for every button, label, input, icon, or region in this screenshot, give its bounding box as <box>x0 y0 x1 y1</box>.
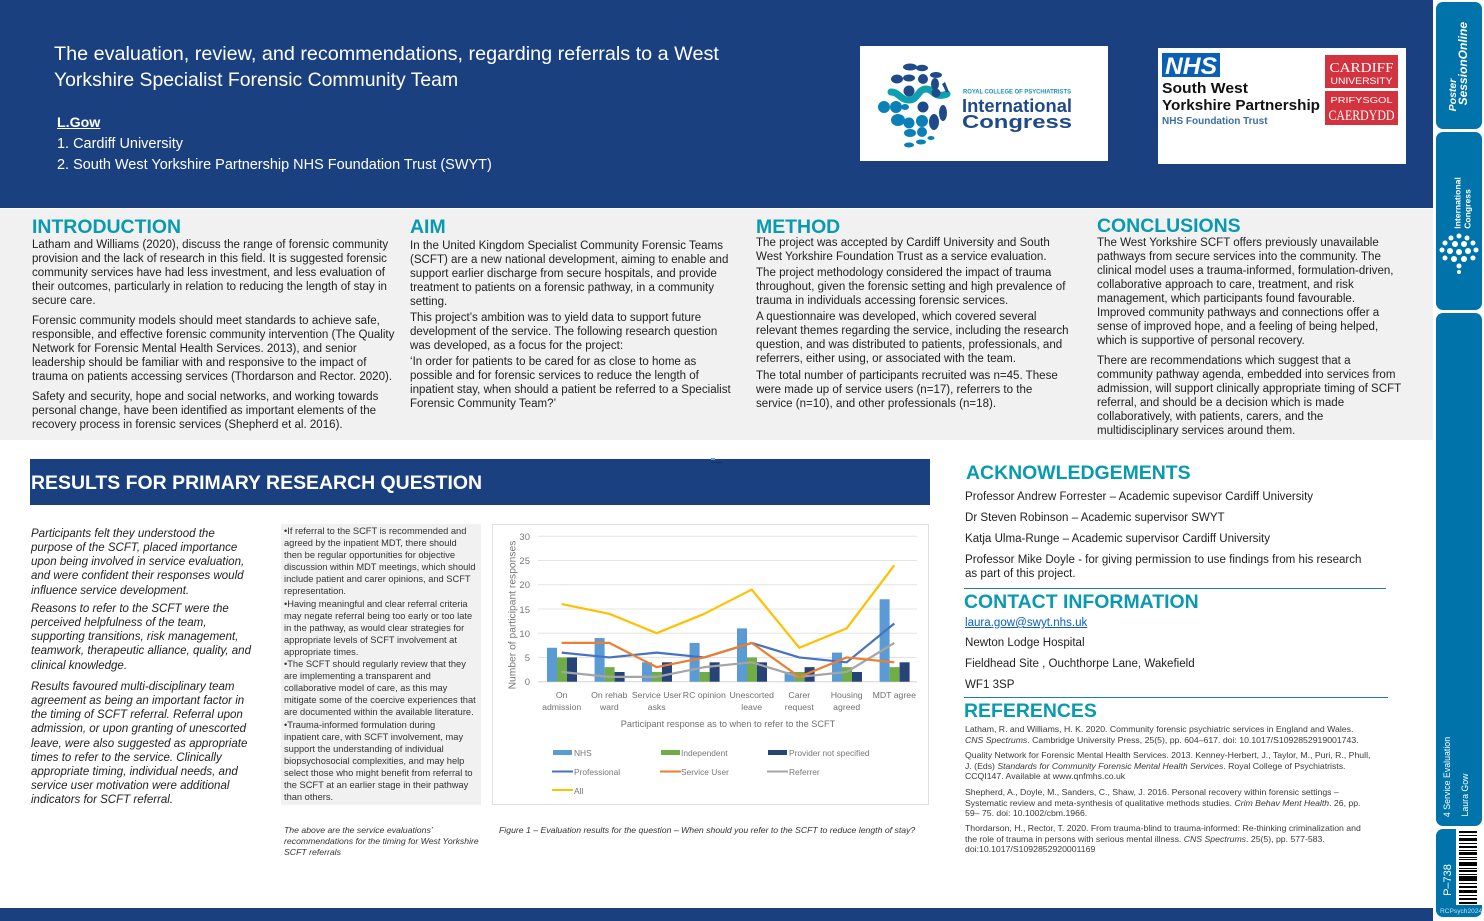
text: introduction paragraph 3 <box>32 391 378 431</box>
authors and affiliations: 2. South West Yorkshire Partnership NHS Foundation Trust (SWYT) <box>57 157 492 173</box>
text: method paragraph 4: were made up of service users (n=17), referrers to the <box>756 384 1032 396</box>
text: reference 3: Shepherd, A., Doyle, M., Sanders, C., Shaw, J. 2016. Personal recovery within forensic settings – <box>965 787 1339 797</box>
text: aim paragraph 2: development of the service. The following research question <box>410 326 717 338</box>
text: introduction paragraph 3: recovery process in forensic services (Shepherd et al. 2016). <box>32 419 343 431</box>
text: reference 2: J. (Eds) Standards for Community Forensic Mental Health Services. Royal College of Psychiatrists. <box>965 761 1345 771</box>
lines <box>562 565 894 677</box>
sidebar tab: PosterSessionOnline <box>1436 2 1482 129</box>
panel: recommendations: then be regular opportunities for objective <box>284 550 455 560</box>
y axis labels: 20 <box>519 580 530 591</box>
text: aim paragraph 2: This project’s ambition was to yield data to support future <box>410 312 701 324</box>
legend: NHS <box>574 748 592 758</box>
text: method paragraph 1 <box>756 237 1050 263</box>
heading: aim: AIM <box>410 216 446 238</box>
text: method paragraph 3 <box>756 311 1069 365</box>
text: recommendations caption: recommendations for the timing for West Yorkshire <box>284 836 479 846</box>
text: introduction paragraph 1: provision and the lack of research in this field. It is suggested forensic <box>32 253 387 265</box>
text: contact details: WF1 3SP <box>965 679 1014 691</box>
text: conclusions paragraph 2: admission, will support clinically appropriate timing of SCFT <box>1097 383 1401 395</box>
text: recommendations caption: The above are the service evaluations’ <box>284 825 433 835</box>
y axis title: Number of participant responses <box>508 541 518 689</box>
text: RCPsych2024: RCPsych2024 <box>1440 908 1482 915</box>
category labels: Carer <box>788 690 810 700</box>
sidebar tab: International Congress <box>1436 132 1482 310</box>
icon: barcode <box>1456 829 1482 905</box>
text: results summary: Participants felt they understood the <box>31 528 215 540</box>
text: introduction paragraph 2: leadership should be familiar with and responsive to the impact of <box>32 357 366 369</box>
legend: Service User <box>681 767 729 777</box>
text: conclusions paragraph 2: collaboratively, with patients, carers, and the <box>1097 411 1323 423</box>
header band <box>0 0 1433 208</box>
text: contact details: Fieldhead Site , Ouchthorpe Lane, Wakefield <box>965 658 1195 670</box>
panel: recommendations: •The SCFT should regularly review that they <box>284 659 466 669</box>
text: reference 1: Latham, R. and Williams, H. K. 2020. Community forensic psychiatric services in England and Wales. <box>965 724 1353 734</box>
text: reference 1 <box>965 724 1359 745</box>
category labels: request <box>785 702 814 712</box>
text: results summary: clinical knowledge. <box>31 660 127 672</box>
text: acknowledgement names: Dr Steven Robinson – Academic supervisor SWYT <box>965 512 1225 524</box>
text: trust name: NHS Foundation Trust <box>1162 116 1268 127</box>
text: aim research question: Forensic Community Team?’ <box>410 398 556 410</box>
panel: references <box>964 700 1370 854</box>
text: aim paragraph 1: (SCFT) are a new national development, aiming to enable and <box>410 254 728 266</box>
icon: Cardiff University crest: PRIFYSGOL <box>1330 95 1393 105</box>
panel: recommendations: •If referral to the SCFT is recommended and <box>284 526 466 536</box>
text: aim research question: ‘In order for patients to be cared for as close to home as <box>410 356 696 368</box>
sidebar tab: poster number and barcode <box>1436 829 1482 917</box>
sidebar tab: International Congress: Congress <box>1462 189 1472 229</box>
title <box>54 43 719 90</box>
panel: recommendations: support the understanding of individual <box>284 744 444 754</box>
panel: aim <box>410 216 731 410</box>
text: introduction paragraph 2: Network for Forensic Mental Health Services. 2013), and senior <box>32 343 357 355</box>
text: method paragraph 3: relevant themes regarding the service, including the research <box>756 325 1069 337</box>
text: results summary: leave, were also suggested as appropriate <box>31 738 247 750</box>
text: results summary: teamwork, therapeutic alliance, quality, and <box>31 645 251 657</box>
panel: conclusions <box>1097 215 1401 437</box>
text: introduction paragraph 2 <box>32 315 394 383</box>
panel: recommendations: may negate referral being too early or too late <box>284 611 472 621</box>
text: results summary: the timing of SCFT referral. Referral upon <box>31 709 243 721</box>
category labels: asks <box>648 702 666 712</box>
heading: introduction: INTRODUCTION <box>32 216 181 238</box>
text: method paragraph 2: The project methodology considered the impact of trauma <box>756 267 1051 279</box>
text: acknowledgement names: Katja Ulma-Runge – Academic supervisor Cardiff University <box>965 533 1270 545</box>
panel: recommendations: discussion within MDT meetings, which should <box>284 562 476 572</box>
y axis labels: 0 <box>525 677 530 688</box>
panel: contact information <box>964 591 1199 691</box>
icon: NHS lozenge: NHS <box>1165 53 1217 80</box>
panel: recommendations: representation. <box>284 586 346 596</box>
text: introduction paragraph 3: Safety and security, hope and social networks, and working towards <box>32 391 378 403</box>
text: conclusions paragraph 2: referral, and should be a decision which is made <box>1097 397 1344 409</box>
text: Royal College of Psychiatrists: ROYAL COLLEGE OF PSYCHIATRISTS <box>963 88 1071 96</box>
panel: recommendations: are implementing a transparent and <box>284 671 431 681</box>
text: results summary: agreement as being an important factor in <box>31 695 244 707</box>
text: trust name: South West <box>1162 81 1248 97</box>
logo: NHS South West Yorkshire Partnership and Cardiff University <box>1158 48 1406 164</box>
text: contact details <box>965 617 1195 691</box>
panel: recommendations <box>281 524 481 805</box>
panel: recommendations: appropriate times. <box>284 647 358 657</box>
text: results summary: indicators for SCFT referral. <box>31 794 173 806</box>
category labels: On rehab <box>591 690 628 700</box>
text: conclusions paragraph 2: multidisciplinary services around them. <box>1097 425 1295 437</box>
text: conclusions paragraph 2: community pathway agenda, embedded into services from <box>1097 369 1395 381</box>
category labels: ward <box>599 702 619 712</box>
panel: recommendations: in the pathway, as would clear strategies for <box>284 623 464 633</box>
icon: Cardiff University crest: CARDIFF <box>1330 61 1394 76</box>
y axis labels: 30 <box>519 532 530 543</box>
title: Yorkshire Specialist Forensic Community Team <box>54 68 458 90</box>
text: reference 2 <box>965 750 1370 781</box>
y axis labels: 25 <box>519 556 530 567</box>
text: Congress: Congress <box>962 112 1072 132</box>
text: contact details: laura.gow@swyt.nhs.uk <box>965 617 1087 629</box>
chart: responses on when to refer to the SCFT <box>492 524 929 805</box>
y axis labels: 15 <box>519 605 530 616</box>
legend: Professional <box>574 767 620 777</box>
legend: Independent <box>681 748 728 758</box>
panel: recommendations: biopsychosocial complexities, and may help <box>284 756 464 766</box>
text: results summary: upon being involved in service evaluation, <box>31 556 244 568</box>
text: aim research question <box>410 356 731 410</box>
text: results summary: purpose of the SCFT, placed importance <box>31 542 237 554</box>
text: aim paragraph 1: support earlier discharge from secure hospitals, and provide <box>410 268 717 280</box>
logo: Royal College of Psychiatrists International Congress <box>860 46 1108 161</box>
icon: Cardiff University crest <box>1325 55 1398 125</box>
text: reference 4: the role of trauma in persons with serious mental illness. CNS Spectrums. 25(5), pp. 577-583. <box>965 834 1325 844</box>
text: recommendations caption: SCFT referrals <box>284 847 341 857</box>
panel: introduction <box>32 216 394 431</box>
text: aim paragraph 2 <box>410 312 717 352</box>
text: method paragraph 2: trauma in individuals accessing forensic services. <box>756 295 1008 307</box>
text: reference 3: 59– 75. doi: 10.1002/cbm.1966. <box>965 808 1087 818</box>
text: conclusions paragraph 1: management, which participants found favourable. <box>1097 293 1355 305</box>
authors and affiliations: L.Gow <box>57 115 100 131</box>
authors and affiliations <box>57 115 492 173</box>
text: results summary: service user motivation were additional <box>31 780 229 792</box>
panel: recommendations: select those who might benefit from referral to <box>284 768 473 778</box>
heading banner: results for primary research question <box>30 459 930 505</box>
text: results summary: supporting transitions, risk management, <box>31 631 238 643</box>
text: figure caption: Figure 1 – Evaluation results for the question – When should you refer to the SCFT to reduce length of stay? <box>499 825 915 835</box>
heading: acknowledgements: ACKNOWLEDGEMENTS <box>966 462 1191 484</box>
category labels: agreed <box>833 702 860 712</box>
text: conclusions paragraph 1: pathways from secure services into the community. The <box>1097 251 1381 263</box>
text: acknowledgement names <box>965 491 1362 580</box>
text: acknowledgement names: as part of this project. <box>965 568 1076 580</box>
category labels: RC opinion <box>683 690 726 700</box>
text: conclusions paragraph 1: clinical model uses a trauma-informed, formulation-driven, <box>1097 265 1394 277</box>
title: The evaluation, review, and recommendations, regarding referrals to a West <box>54 43 719 65</box>
text: acknowledgement names: Professor Andrew Forrester – Academic supevisor Cardiff University <box>965 491 1313 503</box>
sidebar tab: PosterSessionOnline: Poster <box>1447 79 1459 111</box>
category labels: admission <box>542 702 581 712</box>
bars <box>547 599 910 682</box>
category labels: leave <box>741 702 762 712</box>
text: introduction paragraph 1: Latham and Williams (2020), discuss the range of forensic community <box>32 239 388 251</box>
text: results summary: appropriate timing, individual needs, and <box>31 766 238 778</box>
text: poster number: P–738 <box>1442 864 1454 896</box>
panel: recommendations: agreed by the inpatient MDT, there should <box>284 538 457 548</box>
sidebar tab: International Congress: International <box>1452 177 1462 229</box>
text: method paragraph 2: throughout, given the forensic setting and high prevalence of <box>756 281 1065 293</box>
text: conclusions paragraph 1: Improved community pathways and connections offer a <box>1097 307 1379 319</box>
panel: method <box>756 216 1069 410</box>
text: contact details: Newton Lodge Hospital <box>965 637 1085 649</box>
text: conclusions paragraph 2 <box>1097 355 1401 437</box>
icon: sidebar globe <box>1440 234 1478 274</box>
text: method paragraph 4: service (n=10), and other professionals (n=18). <box>756 398 996 410</box>
panel: acknowledgements <box>965 462 1362 580</box>
y axis labels: 5 <box>525 653 530 664</box>
panel: recommendations: appropriate levels of SCFT involvement at <box>284 635 457 645</box>
text: aim paragraph 2: was developed, as a focus for the project: <box>410 340 623 352</box>
category labels: On <box>556 690 568 700</box>
sidebar tab: PosterSessionOnline: SessionOnline <box>1456 22 1470 105</box>
text: introduction paragraph 3: personal change, have been identified as important elements of the <box>32 405 376 417</box>
panel: recommendations: collaborative model of care, as this may <box>284 683 447 693</box>
text: acknowledgement names: Professor Mike Doyle - for giving permission to use findings from his research <box>965 554 1362 566</box>
text: recommendations caption <box>284 825 479 857</box>
text: reference 4 <box>965 823 1361 854</box>
text: aim research question: possible and for forensic services to reduce the length of <box>410 370 699 382</box>
text: trust name: Yorkshire Partnership <box>1162 98 1320 114</box>
text: reference 4: doi:10.1017/S1092852920001169 <box>965 844 1095 854</box>
x axis title: Participant response as to when to refer to the SCFT <box>621 719 836 729</box>
heading: conclusions: CONCLUSIONS <box>1097 215 1241 237</box>
legend: Referrer <box>789 767 820 777</box>
text: reference 1: CNS Spectrums. Cambridge University Press, 25(5), pp. 604–617. doi: 10.1017/S1092852919001743. <box>965 735 1359 745</box>
text: method paragraph 1: The project was accepted by Cardiff University and South <box>756 237 1050 249</box>
panel: recommendations: •Trauma-informed formulation during <box>284 720 435 730</box>
heading banner: results for primary research question: RESULTS FOR PRIMARY RESEARCH QUESTION <box>31 472 482 494</box>
text: aim research question: inpatient stay, when should a patient be referred to a Specialist <box>410 384 731 396</box>
text: aim paragraph 1 <box>410 240 728 308</box>
sidebar tab: session and author: 4 Service Evaluation <box>1442 737 1452 817</box>
panel: recommendations: the SCFT at an earlier stage in their pathway <box>284 780 468 790</box>
text: conclusions paragraph 1: which is supportive of personal recovery. <box>1097 335 1305 347</box>
text: method paragraph 3: referrers, either using, or associated with the team. <box>756 353 1016 365</box>
heading: references: REFERENCES <box>964 700 1097 722</box>
panel: recommendations: •Having meaningful and clear referral criteria <box>284 599 468 609</box>
category labels: Housing <box>831 690 863 700</box>
legend <box>552 748 870 796</box>
text: results summary: Reasons to refer to the SCFT were the <box>31 603 229 615</box>
text: method paragraph 1: West Yorkshire Foundation Trust as a service evaluation. <box>756 251 1047 263</box>
text: reference 3: Systematic review and meta-synthesis of qualitative methods studies. Crim Behav Ment Health. 26, pp. <box>965 798 1360 808</box>
text: conclusions paragraph 1 <box>1097 237 1394 347</box>
text: method paragraph 2 <box>756 267 1066 307</box>
authors and affiliations: 1. Cardiff University <box>57 136 183 152</box>
text: International: International <box>962 96 1072 116</box>
text: reference 3 <box>965 787 1360 818</box>
text: reference 2: CCQI147. Available at www.qnfmhs.co.uk <box>965 771 1125 781</box>
text: conclusions paragraph 1: sense of improved hope, and a feeling of being helped, <box>1097 321 1378 333</box>
category labels: MDT agree <box>873 690 916 700</box>
y axis labels <box>519 532 530 688</box>
heading: method: METHOD <box>756 216 840 238</box>
icon: Cardiff University crest: UNIVERSITY <box>1330 76 1392 86</box>
legend: Provider not specified <box>789 748 870 758</box>
text: method paragraph 3: A questionnaire was developed, which covered several <box>756 311 1037 323</box>
panel: recommendations: are documented within the available literature. <box>284 707 474 717</box>
y axis labels: 10 <box>519 629 530 640</box>
text: results summary: perceived helpfulness of the team, <box>31 617 206 629</box>
text: results summary: admission, or upon granting of unescorted <box>31 723 246 735</box>
text: reference 2: Quality Network for Forensic Mental Health Services. 2013. Kenney-Herbert, J., Taylor, M., Puri, R., Phull, <box>965 750 1370 760</box>
text: aim paragraph 1: setting. <box>410 296 447 308</box>
text: introduction paragraph 2: responsible, and effective forensic community intervention (The Quality <box>32 329 394 341</box>
text: results summary <box>30 528 252 806</box>
heading: contact information: CONTACT INFORMATION <box>964 591 1199 613</box>
category labels: Unescorted <box>729 690 774 700</box>
text: introduction paragraph 2: trauma on patients accessing services (Thordarson and Rector. 2020). <box>32 371 392 383</box>
text: aim paragraph 1: treatment to patients on a forensic pathway, in a community <box>410 282 714 294</box>
text: results summary: influence service development. <box>31 585 189 597</box>
text: introduction paragraph 1: secure care. <box>32 295 96 307</box>
text: introduction paragraph 1: community services have had less investment, and less evaluation of <box>32 267 385 279</box>
panel: recommendations: than others. <box>284 792 333 802</box>
footer band <box>0 908 1433 921</box>
panel: recommendations: mitigate some of the coercive experiences that <box>284 695 476 705</box>
sidebar tab: session and author: Laura Gow <box>1460 773 1470 817</box>
panel: recommendations: include patient and carer opinions, and SCFT <box>284 574 471 584</box>
text: introduction paragraph 1: their outcomes, particularly in relation to reducing the length of stay in <box>32 281 387 293</box>
text: conclusions paragraph 1: The West Yorkshire SCFT offers previously unavailable <box>1097 237 1379 249</box>
text: aim paragraph 1: In the United Kingdom Specialist Community Forensic Teams <box>410 240 723 252</box>
legend: All <box>574 786 583 796</box>
text: method paragraph 4 <box>756 370 1058 410</box>
text: results summary: and were confident their responses would <box>31 570 244 582</box>
text: method paragraph 4: The total number of participants recruited was n=45. These <box>756 370 1058 382</box>
text: trust name <box>1162 81 1320 127</box>
sidebar tab: session and author <box>1436 313 1482 826</box>
text: conclusions paragraph 2: There are recommendations which suggest that a <box>1097 355 1351 367</box>
panel: recommendations: inpatient care, with SCFT involvement, may <box>284 732 463 742</box>
text: conclusions paragraph 1: collaborative approach to care, treatment, and risk <box>1097 279 1354 291</box>
category labels: Service User <box>632 690 682 700</box>
category labels <box>542 690 916 712</box>
text: introduction paragraph 2: Forensic community models should meet standards to achieve safe, <box>32 315 380 327</box>
text: method paragraph 3: question, and was distributed to patients, professionals, and <box>756 339 1062 351</box>
text: reference 4: Thordarson, H., Rector, T. 2020. From trauma-blind to trauma-informed: Re-thinking criminalization and <box>965 823 1361 833</box>
text: results summary: times to refer to the service. Clinically <box>31 752 222 764</box>
panel: upper text band <box>0 209 1433 440</box>
icon: globe of linked dots <box>878 64 949 148</box>
text: introduction paragraph 1 <box>32 239 388 307</box>
text: results summary: Results favoured multi-disciplinary team <box>31 681 235 693</box>
